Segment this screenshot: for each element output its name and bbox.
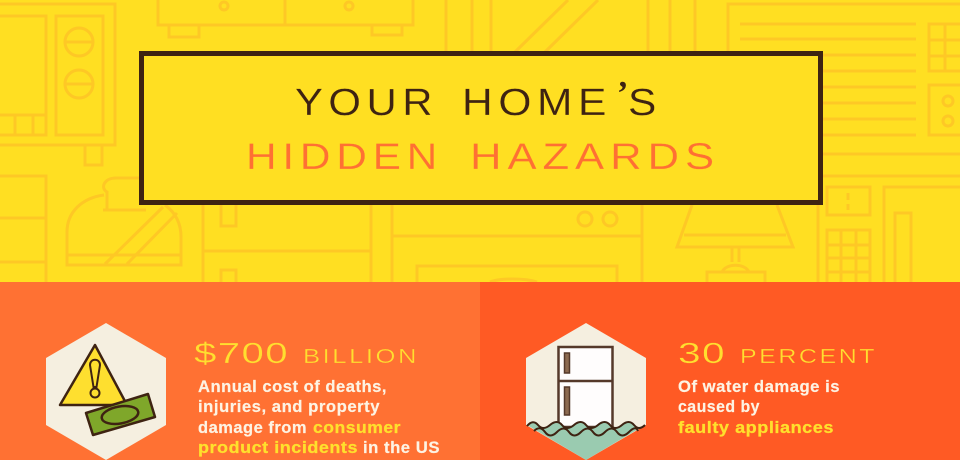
heading: 30 percent	[678, 338, 877, 370]
heading: $700 billion	[194, 338, 419, 370]
text: water damage description: faulty appliances	[678, 419, 834, 437]
heading: $700 billion: $700	[194, 338, 289, 370]
title box	[142, 54, 820, 202]
icon: warning triangle and banknote	[46, 323, 166, 460]
text: annual cost description: injuries, and property	[198, 398, 380, 416]
text: annual cost description: product incidents	[198, 439, 358, 457]
title line 2	[246, 136, 720, 177]
title line 1: HOME	[462, 82, 612, 124]
stove	[392, 205, 642, 282]
panel: consumer product incidents	[0, 282, 480, 460]
shelf	[0, 176, 46, 282]
text: annual cost description	[198, 378, 440, 457]
title line 1: YOUR	[295, 82, 438, 124]
text: annual cost description: Annual cost of deaths,	[198, 378, 387, 396]
heading: 30 percent: 30	[678, 338, 726, 370]
text: water damage description: caused by	[678, 398, 760, 416]
title line 1	[295, 75, 662, 124]
text: annual cost description: in the US	[363, 439, 440, 457]
door and ironing board lines	[446, 0, 695, 52]
icon: flooded refrigerator	[526, 323, 646, 460]
text: annual cost description: damage from	[198, 419, 307, 437]
yellow header background	[0, 0, 960, 282]
heading: $700 billion: BILLION	[303, 346, 419, 368]
dresser	[158, 0, 413, 37]
window blinds	[728, 4, 960, 176]
title line 2: HIDDEN	[246, 136, 443, 177]
heading: 30 percent: PERCENT	[740, 346, 877, 368]
microwave	[0, 4, 115, 165]
text: water damage description	[678, 378, 840, 437]
title line 1: ’	[617, 75, 628, 112]
refrigerator and keypad	[818, 187, 960, 282]
wall panels	[929, 24, 960, 135]
text: water damage description: Of water damage is	[678, 378, 840, 396]
title line 1: S	[628, 82, 662, 124]
lamp	[677, 205, 793, 282]
cabinet	[203, 205, 371, 282]
title line 2: HAZARDS	[470, 136, 720, 177]
toaster	[67, 178, 181, 265]
background pattern: household appliances	[0, 0, 960, 282]
text: annual cost description: consumer	[313, 419, 401, 437]
panel: faulty appliances	[480, 282, 960, 460]
